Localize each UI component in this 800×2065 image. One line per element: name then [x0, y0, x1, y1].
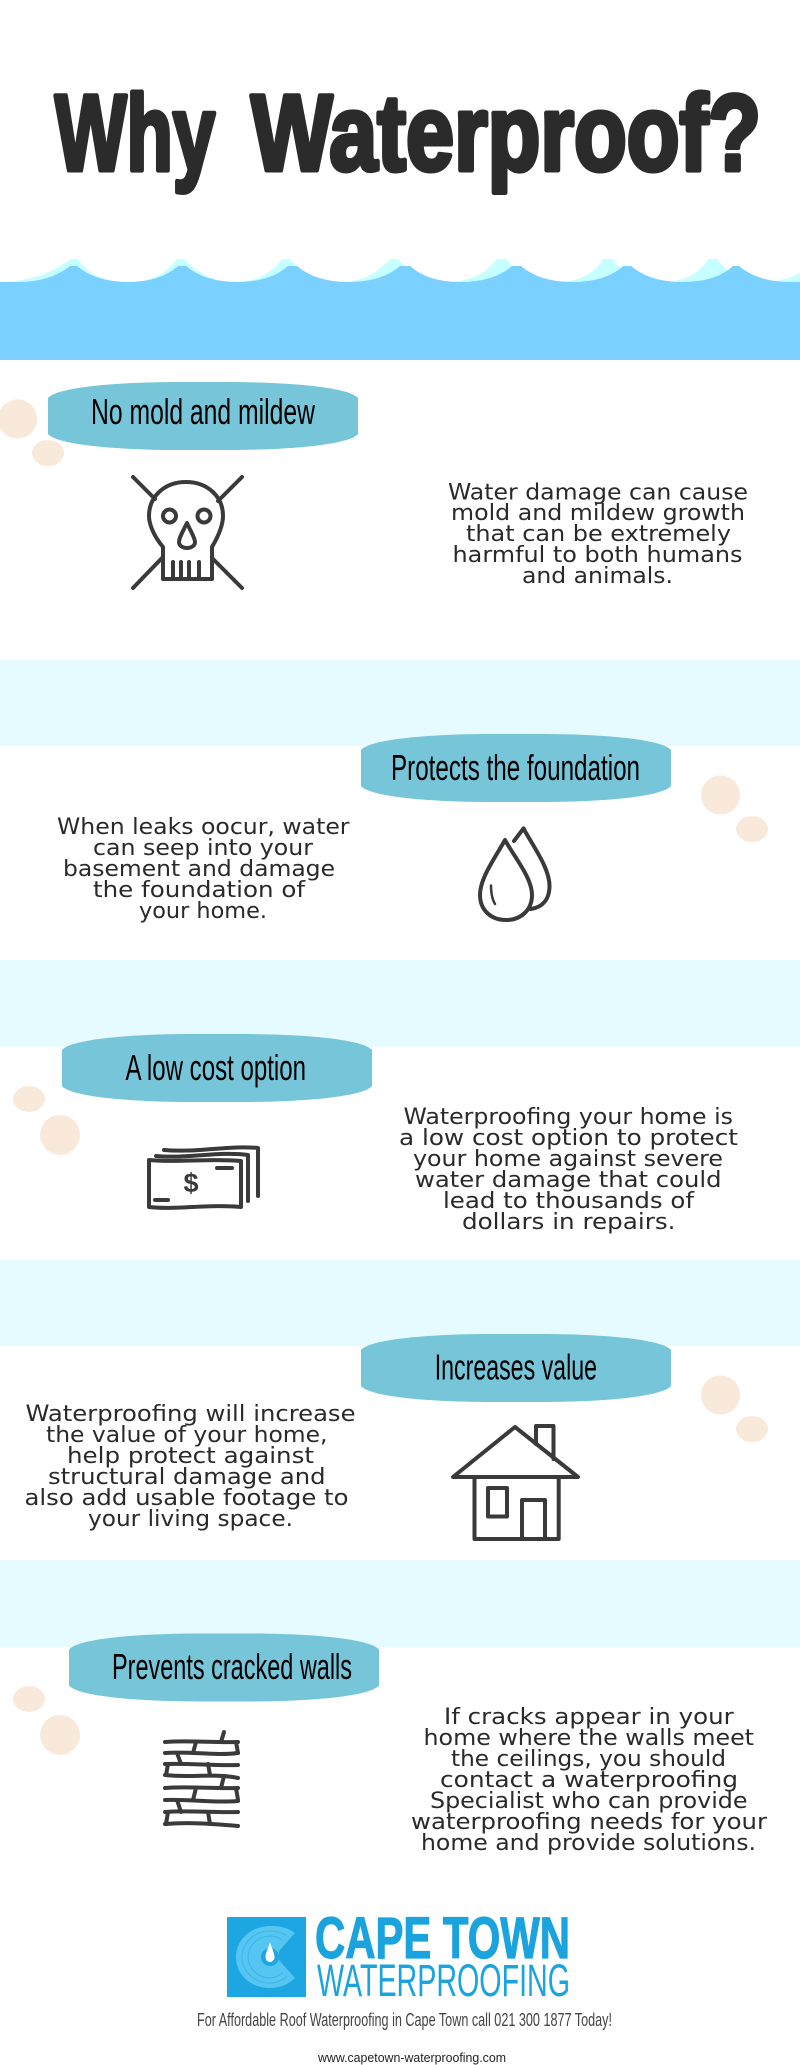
- background band 4: [0, 1560, 800, 1647]
- title: [55, 72, 761, 193]
- water waves banner: [0, 259, 800, 360]
- body text: also add usable footage to: [24, 1486, 348, 1511]
- body text: Specialist who can provide: [430, 1789, 748, 1814]
- decorative circles: [13, 1086, 80, 1155]
- heading pill: [361, 1334, 671, 1402]
- logo wordmark: WATERPROOFING: [317, 1955, 570, 2006]
- body text: dollars in repairs.: [462, 1210, 676, 1235]
- heading pill: No mold and mildew: [91, 391, 316, 432]
- body text: the value of your home,: [46, 1423, 328, 1448]
- background band 1: [0, 660, 800, 746]
- heading pill: [361, 734, 671, 802]
- body text: home and provide solutions.: [421, 1831, 756, 1856]
- body text: When leaks oocur, water: [57, 815, 351, 840]
- body text: waterproofing needs for your: [411, 1810, 768, 1835]
- logo wordmark: [315, 1906, 570, 2006]
- body text: [57, 815, 351, 924]
- icon: skull with crossed bones: [133, 477, 242, 588]
- call to action tagline: For Affordable Roof Waterproofing in Cape Town call 021 300 1877 Today!: [197, 2010, 612, 2030]
- heading pill: Prevents cracked walls: [112, 1646, 352, 1687]
- body text: help protect against: [67, 1444, 314, 1469]
- icon: house: [453, 1426, 578, 1539]
- body text: the ceilings, you should: [451, 1747, 726, 1772]
- background band 3: [0, 1260, 800, 1346]
- panel: a low cost option: [13, 1034, 738, 1235]
- body text: Waterproofing will increase: [26, 1402, 355, 1427]
- icon: brick wall: [165, 1732, 238, 1826]
- body text: [24, 1402, 355, 1532]
- body text: water damage that could: [415, 1168, 722, 1193]
- body text: your home.: [139, 899, 267, 924]
- body text: your home against severe: [413, 1147, 723, 1172]
- background band 2: [0, 960, 800, 1047]
- body text: and animals.: [522, 564, 673, 589]
- panel: no mold and mildew: [0, 382, 748, 589]
- body text: can seep into your: [93, 836, 314, 861]
- body text: If cracks appear in your: [444, 1705, 735, 1730]
- body text: your living space.: [88, 1507, 293, 1532]
- icon: water drops: [480, 828, 550, 920]
- body text: Water damage can cause: [448, 480, 748, 506]
- body text: the foundation of: [93, 878, 306, 903]
- heading pill: Increases value: [435, 1346, 597, 1388]
- decorative circles: [701, 775, 768, 842]
- body text: Waterproofing your home is: [404, 1105, 733, 1130]
- body text: contact a waterproofing: [440, 1768, 738, 1793]
- heading pill: Protects the foundation: [391, 747, 640, 788]
- decorative circles: [13, 1686, 80, 1755]
- body text: home where the walls meet: [424, 1726, 754, 1751]
- body text: a low cost option to protect: [399, 1126, 738, 1151]
- logo mark: [227, 1917, 306, 1997]
- company logo: [227, 1906, 570, 2006]
- body text: structural damage and: [48, 1465, 326, 1490]
- panel: protects the foundation: [57, 734, 768, 924]
- panel: increases value: [24, 1334, 768, 1539]
- heading pill: [62, 1034, 372, 1102]
- body text: [411, 1705, 768, 1856]
- body text: [448, 480, 748, 589]
- title: Why: [55, 72, 215, 193]
- decorative circles: [0, 399, 64, 466]
- icon: stack of banknotes: [149, 1147, 258, 1208]
- body text: [399, 1105, 738, 1235]
- body text: that can be extremely: [466, 522, 731, 547]
- body text: mold and mildew growth: [451, 501, 745, 526]
- logo wordmark: CAPE TOWN: [315, 1906, 570, 1971]
- decorative circles: [701, 1375, 768, 1442]
- dollar sign: $: [183, 1168, 199, 1198]
- body text: lead to thousands of: [443, 1189, 695, 1214]
- website url: www.capetown-waterproofing.com: [317, 2050, 506, 2065]
- panel: prevents cracked walls: [13, 1634, 768, 1856]
- body text: harmful to both humans: [452, 543, 742, 568]
- heading pill: A low cost option: [126, 1047, 306, 1088]
- heading pill: [69, 1634, 379, 1702]
- heading pill: [48, 382, 358, 450]
- body text: basement and damage: [63, 857, 335, 882]
